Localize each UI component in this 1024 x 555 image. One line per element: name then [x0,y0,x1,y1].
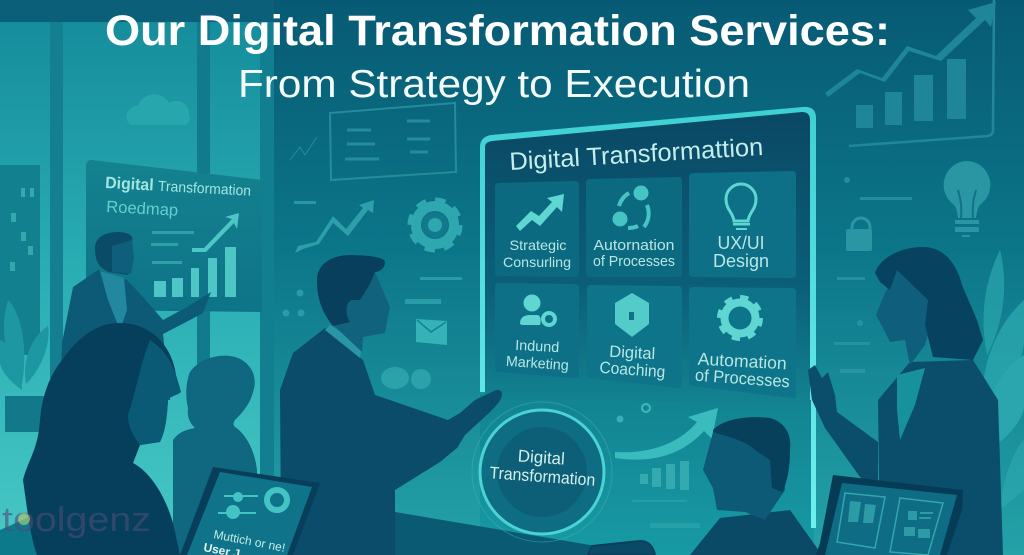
roadmap board: Roedmap [106,198,179,220]
lower panel area [395,395,814,555]
person: right woman [808,247,1003,555]
watermark: toolgenz [2,501,151,539]
title [105,7,890,106]
roadmap board [86,160,262,312]
service card: UX/UI design: UX/UI [718,233,764,253]
icon: wall gear [411,201,459,249]
service card: digital coaching: Digital [609,343,656,363]
service card: UX/UI design: Design [713,251,769,271]
title: Our Digital Transformation Services: [105,7,890,55]
service card: automation of processes [586,177,682,277]
person: presenter [60,232,211,400]
arrow swoosh [615,408,718,460]
service card: automation of processes 2: Automation [697,349,787,373]
service card: inbound marketing: Marketing [505,354,569,374]
digital transformation dial: Transformation [489,463,596,490]
service card: digital coaching: Coaching [599,359,666,381]
lower panel decorations [615,404,718,528]
background plant, right [980,250,1024,510]
service card: UX/UI design [689,171,796,278]
service card: automation of processes 2: of Processes [694,366,790,391]
service card: digital coaching [587,285,682,388]
tablet: left: Muttich or ne! [212,527,286,555]
panel title: Digital Transformattion [509,133,764,176]
wall dashes and dots [282,201,462,389]
icon: light bulb [944,161,990,237]
tablet: left [180,467,320,555]
wall chart, top right [825,0,996,146]
icon: padlock [846,218,872,251]
person: seated figure behind [173,356,257,555]
digital transformation dial [472,402,612,542]
service card: automation of processes: Autornation [594,237,674,254]
service card: strategic consulting [495,181,579,277]
roadmap chart [151,213,239,297]
person: bottom centre man [690,417,822,555]
person: centre man [280,255,502,555]
main digital panel [480,107,816,528]
wall widget: dashboard screen [290,103,456,180]
right wall dashes [834,177,912,373]
service card: strategic consulting: Strategic [510,237,566,253]
roadmap board title: Digital Transformation [105,174,252,200]
service card: inbound marketing: Indund [515,338,560,356]
service card: strategic consulting: Consurling [503,254,571,270]
small device, bottom centre [588,541,655,555]
laptop: right [816,475,963,555]
person: left woman silhouette [23,323,181,555]
service card: inbound marketing [495,283,579,378]
background plant, left [0,300,48,432]
digital transformation dial: Digital [517,446,565,469]
icon: envelope [416,319,447,345]
service card: automation of processes 2 [689,287,796,398]
title: From Strategy to Execution [238,63,750,106]
wall widget: line chart [295,200,374,253]
service card: automation of processes: of Processes [593,253,675,270]
windows on the left [0,0,274,555]
